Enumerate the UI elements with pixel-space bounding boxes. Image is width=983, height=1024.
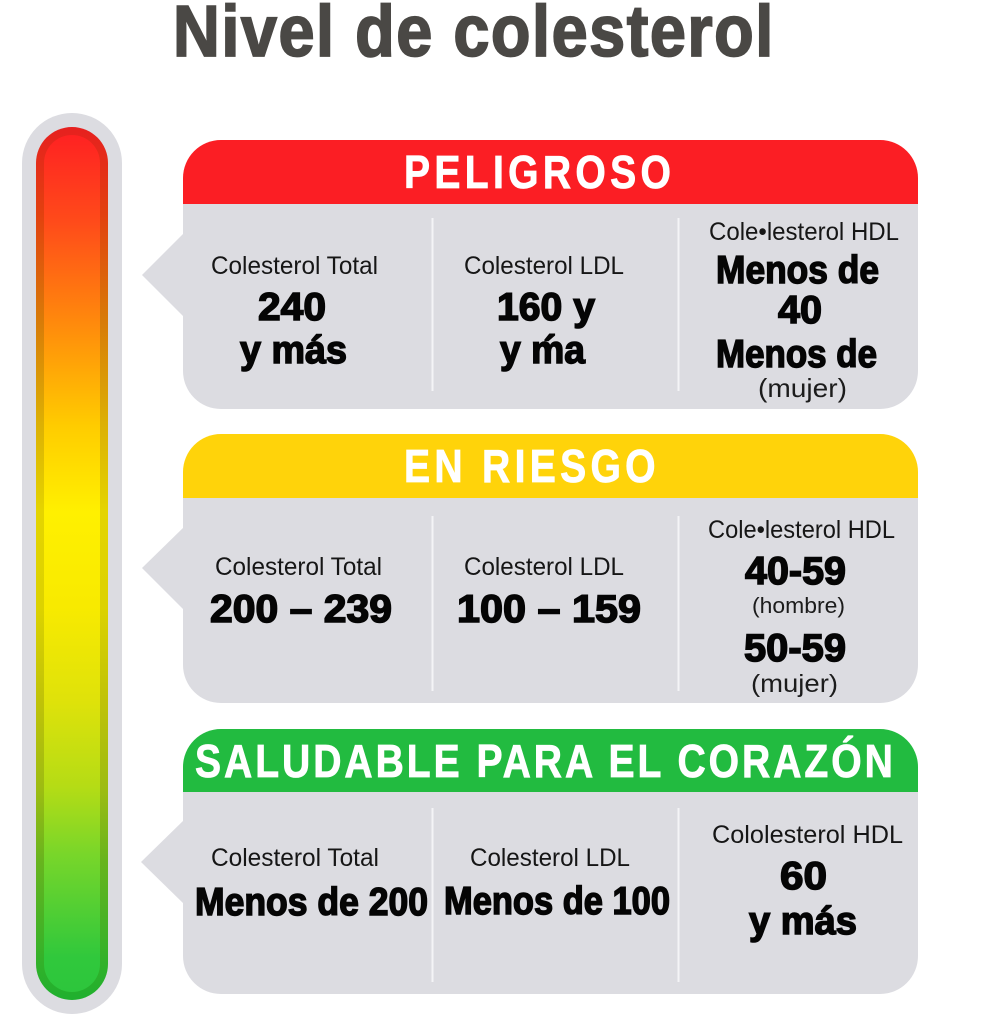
hdl: en riesgo: 50-59 [744,627,846,670]
hdl: peligroso: Cole•lesterol HDL [709,218,899,246]
total: peligroso: Colesterol Total [211,252,378,280]
hdl: saludable: y más [749,900,857,943]
total: saludable: Menos de 200 [195,881,428,924]
thermometer scale [22,113,122,1014]
total: saludable: Colesterol Total [211,844,379,872]
hdl: en riesgo: 40-59 [745,550,846,593]
hdl: peligroso [709,218,899,403]
total: en riesgo: Colesterol Total [215,553,382,581]
hdl: peligroso: (mujer) [758,373,847,403]
heading: en riesgo: EN RIESGO [404,441,656,493]
hdl: en riesgo: (mujer) [751,670,838,698]
hdl: saludable: 60 [780,855,827,898]
header band: saludable [183,729,918,792]
hdl: saludable [712,821,903,943]
heading: saludable: SALUDABLE PARA EL CORAZÓN [195,735,893,788]
total: en riesgo: 200 – 239 [210,588,392,631]
ldl: peligroso: Colesterol LDL [464,252,624,280]
card body: saludable [183,788,918,994]
pointer: saludable [141,820,184,904]
ldl: en riesgo [457,553,641,631]
ldl: en riesgo: Colesterol LDL [464,553,624,581]
total: peligroso [211,252,378,372]
panel: en riesgo [142,434,918,703]
panel: saludable para el corazon [141,729,918,994]
hdl: en riesgo: Cole•lesterol HDL [708,516,895,544]
ldl: saludable: Menos de 100 [444,880,670,923]
hdl: en riesgo: (hombre) [752,593,845,618]
total: peligroso: y más [240,329,347,372]
hdl: en riesgo [708,516,895,698]
pointer: peligroso [142,233,184,317]
header band: peligroso [183,140,918,204]
hdl: peligroso: Menos de [716,333,877,376]
hdl: peligroso: 40 [778,289,822,332]
panel: peligroso [142,140,918,409]
heading: peligroso: PELIGROSO [404,147,671,199]
total: saludable [195,844,428,924]
card body: en riesgo [183,494,918,703]
ldl: peligroso: 160 y [497,286,595,329]
card body: peligroso [183,200,918,409]
hdl: peligroso: Menos de [716,249,879,292]
header band: en riesgo [183,434,918,498]
ldl: peligroso: y ḿa [500,329,585,372]
pointer: en riesgo [142,527,184,610]
ldl: peligroso [464,252,624,372]
total: peligroso: 240 [258,286,326,329]
ldl: saludable [444,844,670,923]
total: en riesgo [210,553,392,631]
hdl: saludable: Cololesterol HDL [712,821,903,849]
ldl: en riesgo: 100 – 159 [457,588,641,631]
ldl: saludable: Colesterol LDL [470,844,630,872]
